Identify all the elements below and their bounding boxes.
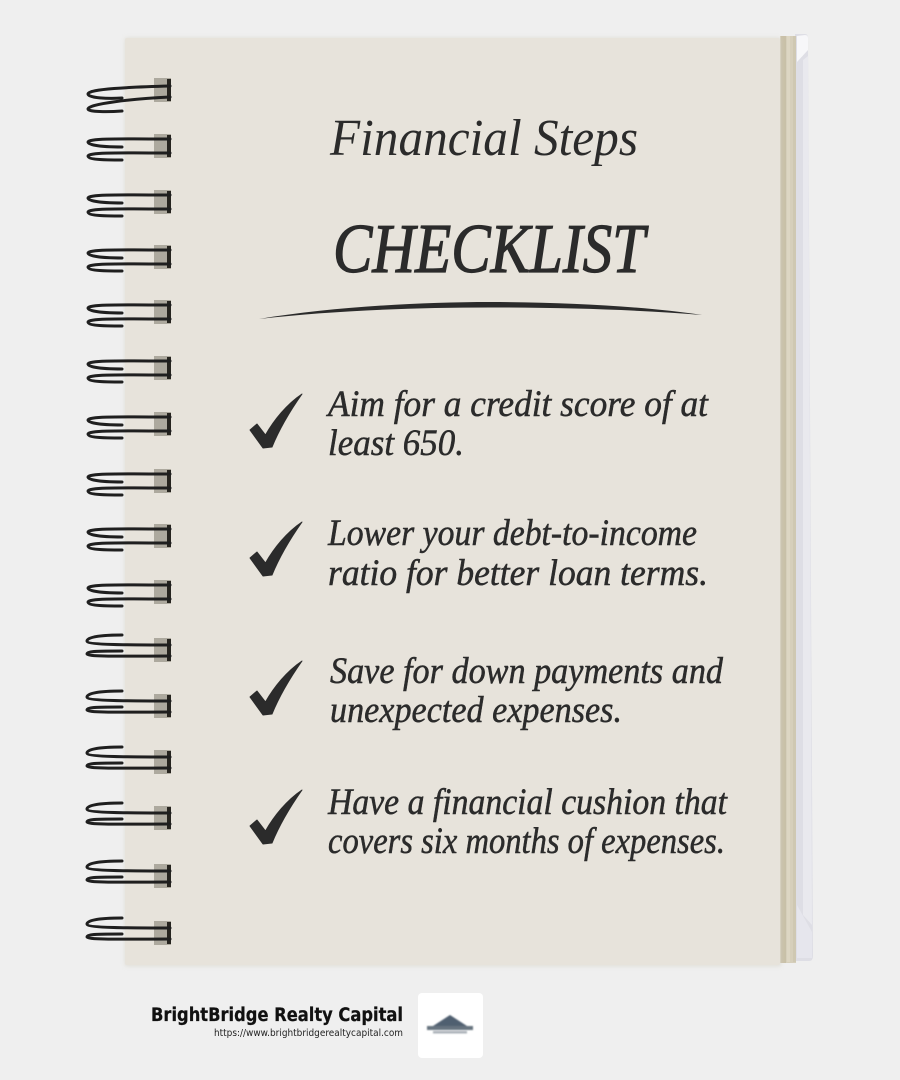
notebook page [125,38,781,966]
title: Financial Steps: Financial Steps [329,110,638,167]
footer brand name: BrightBridge Realty Capital [151,1005,403,1026]
item 2 text: ratio for better loan terms. [328,553,708,594]
checklist item 2 [250,513,708,594]
icon: check mark [250,661,302,715]
item 1 text: Aim for a credit score of at [325,384,710,425]
checklist item 1 [250,384,710,464]
notebook back cover [795,34,813,961]
spiral binding [87,78,171,945]
footer website url: https://www.brightbridgerealtycapital.com [214,1028,403,1039]
item 2 text: Lower your debt-to-income [327,513,697,554]
icon: check mark [250,522,302,576]
item 4 text: covers six months of expenses. [328,821,725,862]
heading underline [259,302,702,319]
item 4 text: Have a financial cushion that [327,782,729,823]
icon: check mark [250,790,302,844]
footer logo [418,993,483,1058]
item 1 text: least 650. [328,423,464,464]
item 3 text: unexpected expenses. [330,690,622,731]
icon: check mark [250,394,302,448]
item 3 text: Save for down payments and [330,651,723,692]
heading: CHECKLIST: CHECKLIST [333,211,649,288]
checklist item 3 [250,651,723,731]
stacked page edges [780,36,796,963]
checklist item 4 [250,782,729,862]
